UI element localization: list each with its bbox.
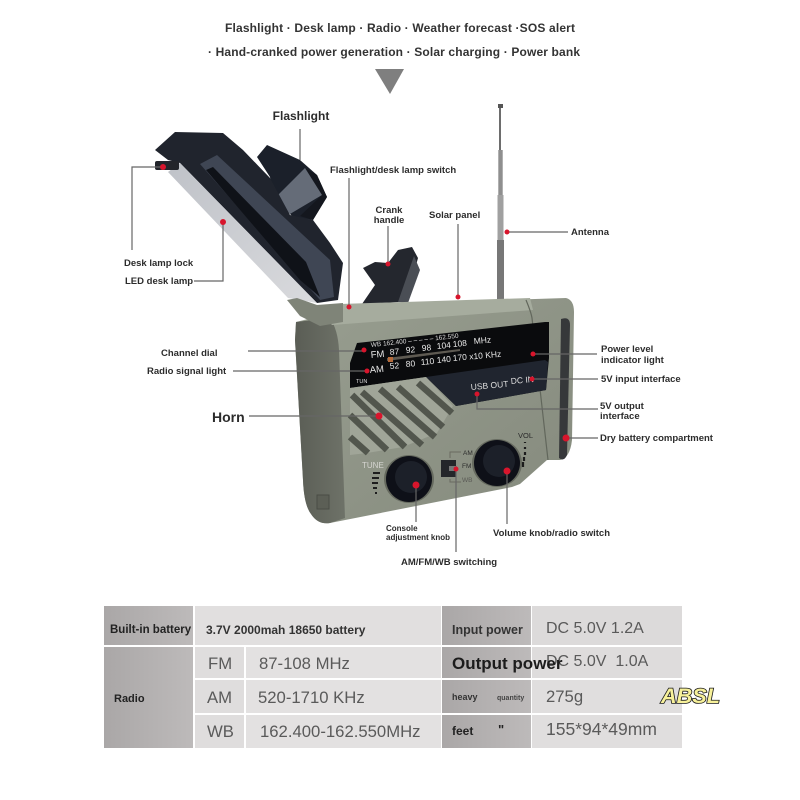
dial scale: 87 <box>389 346 400 357</box>
black lid <box>155 132 343 303</box>
dry battery compartment <box>559 318 570 459</box>
lock tab <box>155 161 179 170</box>
callout labels: 5V output <box>600 401 645 412</box>
top feature list <box>208 21 580 59</box>
top feature list: Flashlight · Desk lamp · Radio · Weather forecast ·SOS alert <box>225 21 575 35</box>
table right text: 155*94*49mm <box>546 719 657 739</box>
AM/FM/WB switch: FM <box>462 463 471 470</box>
callout labels: Antenna <box>571 227 610 238</box>
dial scale <box>356 333 534 392</box>
horn grille <box>350 377 453 455</box>
table cell backgrounds <box>104 606 682 748</box>
dial scale: 92 <box>405 344 416 355</box>
dial scale: 80 <box>405 358 416 369</box>
icon: down arrow <box>375 69 404 94</box>
table right text: quantity <box>497 695 524 702</box>
table left text: AM <box>207 688 232 707</box>
table right text: 275g <box>546 687 583 706</box>
callout labels: Channel dial <box>161 348 217 359</box>
display panel <box>350 322 549 406</box>
callout labels: handle <box>374 215 404 226</box>
dial scale: AM <box>369 364 385 376</box>
dial scale: 110 <box>420 356 435 367</box>
callout labels: indicator light <box>601 355 665 366</box>
callout labels: 5V input interface <box>601 374 681 385</box>
callout labels <box>124 109 714 568</box>
table right text: feet <box>452 724 473 738</box>
dial scale: MHz <box>473 335 492 346</box>
grey-blue lid panel <box>200 155 334 300</box>
LED lamp panel <box>168 163 317 303</box>
callout labels: interface <box>600 411 640 422</box>
callout dots <box>160 164 570 488</box>
callout labels: Power level <box>601 344 653 355</box>
dial scale: WB 162.400 – – – – – 162.550 <box>370 333 459 349</box>
callout labels: AM/FM/WB switching <box>401 557 497 568</box>
flashlight cylinder <box>257 145 327 220</box>
specification table <box>104 606 682 748</box>
volume knob <box>472 431 533 487</box>
radio body <box>295 298 574 523</box>
dial scale: 98 <box>421 342 432 353</box>
table right text: Output power <box>452 654 563 673</box>
table left text: 520-1710 KHz <box>258 688 365 707</box>
tune knob: TUNE <box>362 461 384 470</box>
top feature list: · Hand-cranked power generation · Solar charging · Power bank <box>208 45 580 59</box>
callout labels: Flashlight/desk lamp switch <box>330 165 456 176</box>
table right text: Input power <box>452 623 523 637</box>
dial scale: USB OUT <box>470 379 509 392</box>
hinge <box>287 298 343 326</box>
table left text: FM <box>208 654 232 673</box>
crank handle <box>362 247 420 304</box>
volume knob: VOL <box>518 431 533 440</box>
table left text: WB <box>207 722 234 741</box>
callout labels: Horn <box>212 409 245 425</box>
AM/FM/WB switch: AM <box>463 450 473 457</box>
dial scale: 52 <box>389 360 400 371</box>
table right text: heavy <box>452 692 478 702</box>
callout labels: Dry battery compartment <box>600 433 714 444</box>
callout lines <box>132 129 598 552</box>
table left text <box>110 623 420 741</box>
table right text: DC 5.0V 1.0A <box>546 653 649 670</box>
dial scale: 140 <box>436 354 452 365</box>
table left text: 87-108 MHz <box>259 654 350 673</box>
table left text: Built-in battery <box>110 624 192 636</box>
dial scale: 104 <box>436 340 452 351</box>
table left text: Radio <box>114 693 145 705</box>
callout labels: LED desk lamp <box>125 276 193 287</box>
callout labels: Solar panel <box>429 210 480 221</box>
lamp head <box>155 132 343 326</box>
dial scale: FM <box>370 349 385 361</box>
table left text: 3.7V 2000mah 18650 battery <box>206 623 366 637</box>
AM/FM/WB switch: WB <box>462 477 472 484</box>
dial scale: TUN <box>356 379 367 385</box>
table left text: 162.400-162.550MHz <box>260 722 420 741</box>
AM/FM/WB switch <box>441 450 473 484</box>
table right text: DC 5.0V 1.2A <box>546 620 644 637</box>
table right text <box>452 620 657 739</box>
side hatch <box>317 495 329 509</box>
callout labels: Radio signal light <box>147 366 227 377</box>
callout labels: adjustment knob <box>386 533 450 542</box>
callout labels: Volume knob/radio switch <box>493 528 610 539</box>
callout labels: Flashlight <box>273 109 329 123</box>
watermark: ABSL: ABSL <box>660 685 720 708</box>
tune knob <box>362 455 434 503</box>
callout labels: Crank <box>376 205 403 216</box>
antenna <box>497 104 504 300</box>
dial scale: DC IN <box>510 374 534 386</box>
dial scale: 108 <box>452 338 468 349</box>
callout labels: Console <box>386 524 418 533</box>
dial scale: 170 x10 KHz <box>452 349 502 363</box>
callout labels: Desk lamp lock <box>124 258 194 269</box>
table right text: " <box>498 722 504 737</box>
